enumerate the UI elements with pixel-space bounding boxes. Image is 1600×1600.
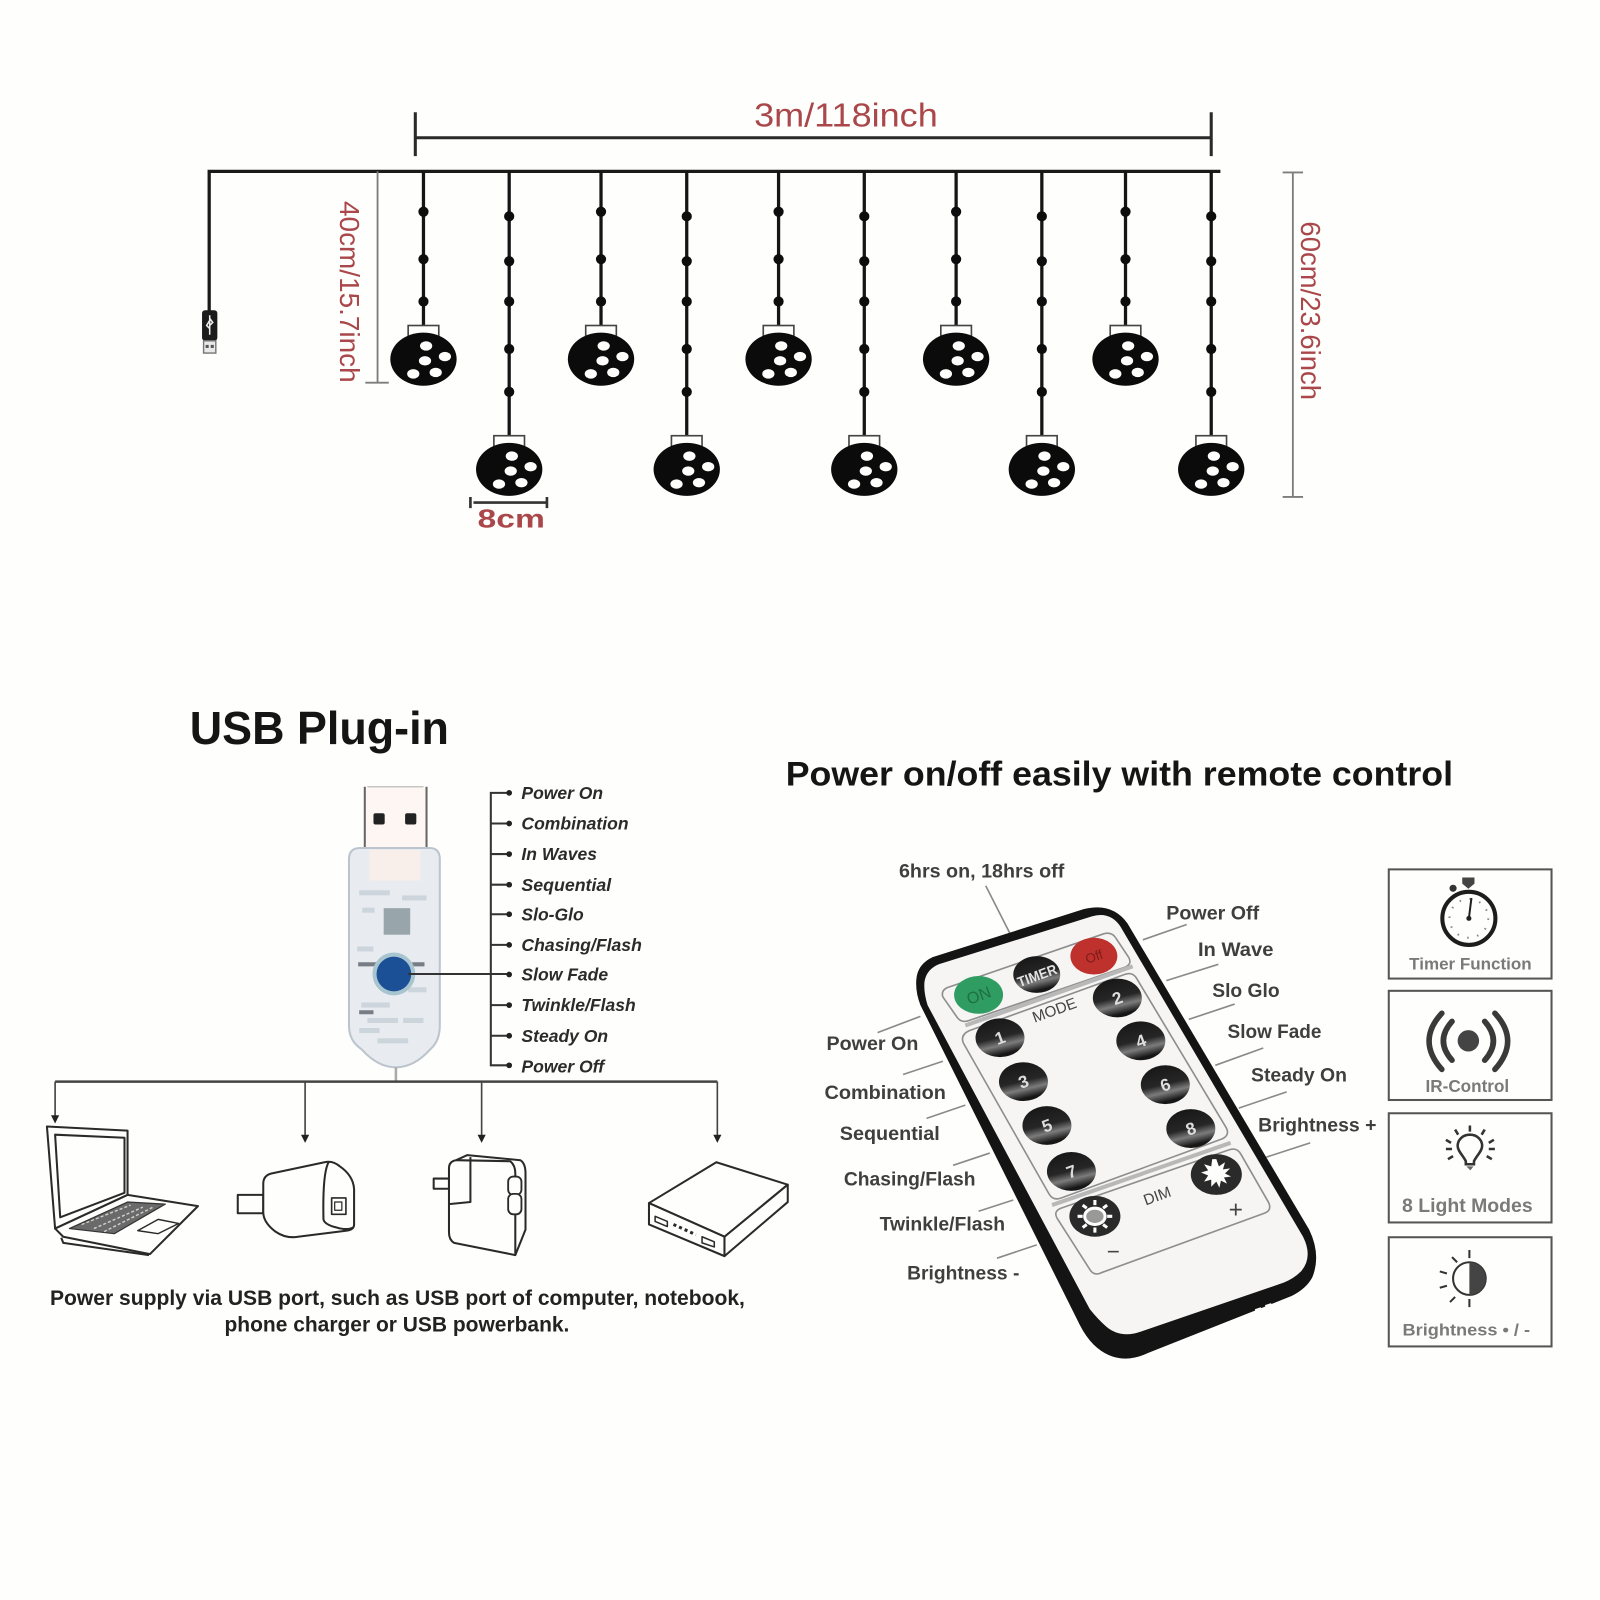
list of light modes: Power Off: [521, 1056, 606, 1076]
caption: USB power supply: Power supply via USB port, such as USB port of computer, notebook,: [50, 1287, 745, 1310]
mode number buttons: 1: [992, 1027, 1008, 1049]
list of light modes: Steady On: [521, 1026, 608, 1046]
icon: wall adapter: [434, 1155, 526, 1255]
list of light modes: Slo-Glo: [521, 904, 584, 924]
dimension: 60cm/23.6inch: [1283, 172, 1326, 497]
main wire with USB lead: [202, 171, 1220, 353]
mode number buttons: 8: [1183, 1118, 1199, 1140]
icon: stopwatch: [1442, 878, 1495, 945]
remote labels: top and right: Brightness +: [1258, 1115, 1377, 1137]
remote labels: left: Twinkle/Flash: [880, 1214, 1005, 1236]
panel: brightness: [1389, 1237, 1552, 1346]
remote labels: top and right: 6hrs on, 18hrs off: [899, 861, 1065, 883]
panel: brightness: Brightness • / -: [1403, 1322, 1530, 1340]
panel: IR control: [1389, 991, 1552, 1100]
remote labels: left: Combination: [824, 1082, 946, 1104]
icon: power bank: [649, 1162, 788, 1256]
mode number buttons: [976, 979, 1215, 1191]
remote labels: top and right: Slo Glo: [1212, 980, 1280, 1002]
dimension: 60cm/23.6inch: 60cm/23.6inch: [1295, 221, 1326, 400]
button: OFF: [1070, 938, 1117, 974]
panel: 8 light modes: 8 Light Modes: [1402, 1195, 1533, 1217]
dimension: 8cm: 8cm: [478, 506, 545, 534]
remote printed labels: DIM: [1141, 1184, 1173, 1209]
translucent controller body: [349, 848, 440, 1067]
panel: timer function: Timer Function: [1409, 954, 1532, 973]
short strings with beads: [418, 171, 1131, 329]
upper row of globe bulbs: [390, 326, 1159, 386]
list of light modes: Twinkle/Flash: [521, 995, 636, 1015]
button: ON: ON: [964, 983, 994, 1009]
icon: USB plug: [202, 310, 217, 353]
remote labels: top and right: [899, 861, 1377, 1137]
list of light modes: Power On: [521, 783, 603, 803]
remote face: [924, 915, 1308, 1334]
panel: timer function: [1389, 869, 1552, 979]
icon: half sun: [1440, 1250, 1486, 1307]
remote labels: top and right: Steady On: [1251, 1065, 1347, 1087]
button panels: [942, 933, 1270, 1274]
USB plug metal: [365, 787, 427, 848]
mode number buttons: 2: [1109, 987, 1125, 1009]
remote control: [916, 907, 1316, 1359]
mode number buttons: 4: [1133, 1030, 1149, 1052]
remote labels: left: [824, 1033, 1019, 1285]
mode number buttons: 6: [1157, 1074, 1174, 1096]
list of light modes: In Waves: [521, 844, 597, 864]
caption: USB power supply: [50, 1287, 745, 1337]
width dimension: 3m/118inch: 3m/118inch: [754, 98, 938, 135]
list of light modes: Chasing/Flash: [521, 935, 642, 955]
leader lines to remote buttons: [878, 886, 1310, 1258]
button: OFF: Off: [1083, 947, 1105, 967]
charging port notch: [1255, 1304, 1271, 1310]
remote printed labels: −: [1107, 1239, 1120, 1264]
width dimension: 3m/118inch: [415, 98, 1211, 156]
icon: light bulb: [1446, 1126, 1495, 1170]
remote labels: left: Power On: [827, 1033, 918, 1055]
heading: USB Plug-in: USB Plug-in: [190, 702, 449, 754]
remote labels: left: Sequential: [840, 1123, 940, 1145]
USB controller illustration: [349, 787, 510, 1082]
dimension: 8cm: [470, 497, 547, 534]
caption: USB power supply: phone charger or USB powerbank.: [224, 1314, 569, 1337]
lower row of globe bulbs: [476, 436, 1244, 496]
icon: infrared signal: [1429, 1013, 1508, 1069]
remote casing: [916, 907, 1316, 1359]
dimension: 40cm/15.7inch: 40cm/15.7inch: [334, 201, 365, 383]
remote labels: left: Chasing/Flash: [844, 1169, 976, 1191]
list of light modes: Slow Fade: [521, 965, 608, 985]
long strings with beads: [504, 171, 1216, 439]
mode number buttons: 3: [1016, 1071, 1032, 1093]
brightness up button: [1191, 1154, 1242, 1195]
icon: laptop: [47, 1127, 198, 1255]
remote labels: top and right: In Wave: [1198, 939, 1274, 961]
button: TIMER: TIMER: [1016, 962, 1060, 991]
lead wire: [395, 1067, 397, 1082]
panel: 8 light modes: [1389, 1113, 1552, 1222]
remote labels: left: Brightness -: [907, 1263, 1019, 1285]
dimension: 40cm/15.7inch: [334, 171, 389, 383]
heading: remote control: Power on/off easily with remote control: [786, 756, 1453, 794]
panel: IR control: IR-Control: [1426, 1076, 1509, 1096]
list of light modes: Combination: [521, 814, 629, 834]
mode number buttons: 5: [1039, 1114, 1055, 1137]
list of light modes: Sequential: [521, 875, 612, 895]
list of light modes: [491, 783, 642, 1076]
chip: [384, 908, 410, 935]
remote labels: top and right: Slow Fade: [1228, 1021, 1322, 1043]
button: ON: [954, 976, 1003, 1014]
blue button: [377, 957, 411, 991]
remote printed labels: +: [1229, 1196, 1243, 1223]
power distribution arrows: [51, 1082, 721, 1143]
icon: phone charger: [238, 1162, 354, 1237]
remote printed labels: [1030, 995, 1243, 1264]
remote labels: top and right: Power Off: [1166, 902, 1260, 924]
remote printed labels: MODE: [1030, 995, 1079, 1027]
mode number buttons: 7: [1064, 1160, 1079, 1183]
brightness down button: [1069, 1196, 1120, 1237]
